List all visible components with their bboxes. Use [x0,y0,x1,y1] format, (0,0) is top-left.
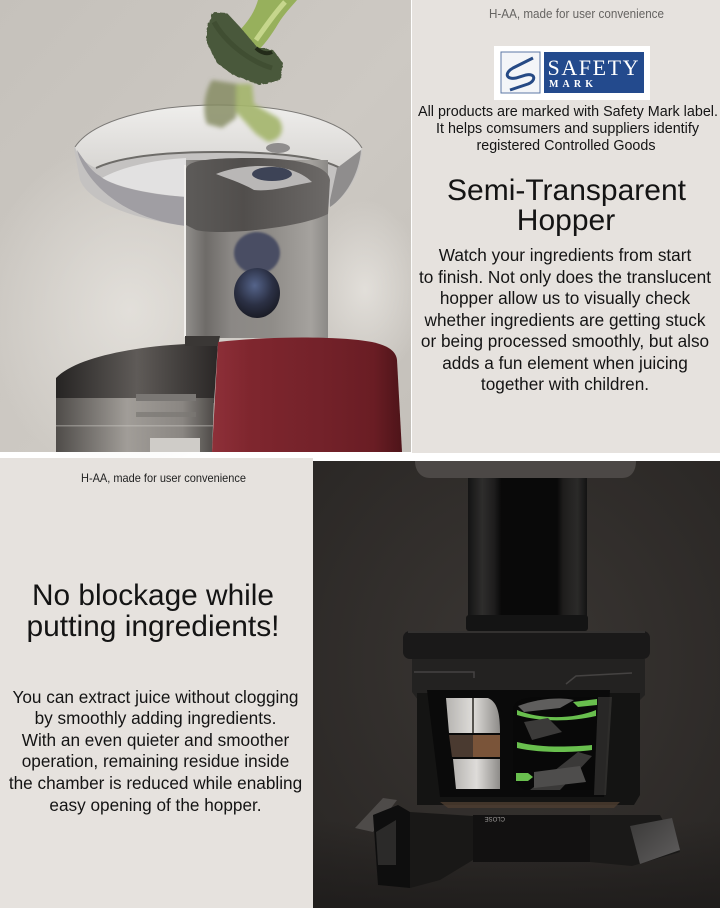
panel: hopper photo [0,0,425,480]
hopper description: to finish. Not only does the translucent [419,267,711,287]
feed tube [468,478,587,618]
upper body [412,659,645,700]
hopper description: hopper allow us to visually check [440,288,691,308]
heading: semi-transparent hopper: Semi-Transparent [447,174,687,207]
no blockage description: easy opening of the hopper. [49,795,262,815]
heading: no blockage: No blockage while [32,579,274,612]
panel: safety mark text [412,0,720,453]
no blockage description: operation, remaining residue inside [22,751,289,771]
hopper description: Watch your ingredients from start [439,245,691,265]
icon: safety mark logo [494,46,650,100]
no blockage description: With an even quieter and smoother [22,730,290,750]
panel: juicer chamber photo [313,461,720,908]
safety mark description: It helps comsumers and suppliers identify [436,121,700,137]
juicer base: CLOSE [485,815,505,821]
hopper description: whether ingredients are getting stuck [424,310,706,330]
hopper description: adds a fun element when juicing [442,353,688,373]
icon: safety mark logo: SAFETY [548,55,639,80]
hopper rim [74,105,362,226]
auger window [513,697,598,790]
safety mark description: All products are marked with Safety Mark label. [418,104,718,120]
heading: no blockage: putting ingredients! [26,610,280,643]
juicer red body [212,338,402,452]
hopper base [415,461,636,478]
juicer lid [56,336,220,452]
no blockage description: by smoothly adding ingredients. [35,708,276,728]
flange [403,631,650,659]
hopper description [419,245,711,394]
no blockage description [9,687,302,815]
hopper description: or being processed smoothly, but also [421,331,709,351]
heading: semi-transparent hopper [447,174,687,237]
heading: no blockage [26,579,280,643]
safety mark description: registered Controlled Goods [476,138,656,154]
icon: broccoli [207,0,297,85]
icon: safety mark logo: MARK [549,79,593,90]
no blockage description: You can extract juice without clogging [12,687,299,707]
no blockage description: the chamber is reduced while enabling [9,773,302,793]
chamber [417,690,640,805]
semi-transparent hopper tube [184,143,330,338]
icon: broccoli reflection [204,80,282,142]
filter window [446,698,500,789]
icon: blueberries [234,232,280,318]
juicer base [355,798,680,888]
heading: semi-transparent hopper: Hopper [517,204,615,237]
small heading: H-AA, made for user convenience [489,6,664,21]
panel: no blockage text [0,458,313,908]
hopper description: together with children. [481,374,649,394]
safety mark description [418,104,718,154]
small heading: H-AA, made for user convenience [81,471,246,485]
